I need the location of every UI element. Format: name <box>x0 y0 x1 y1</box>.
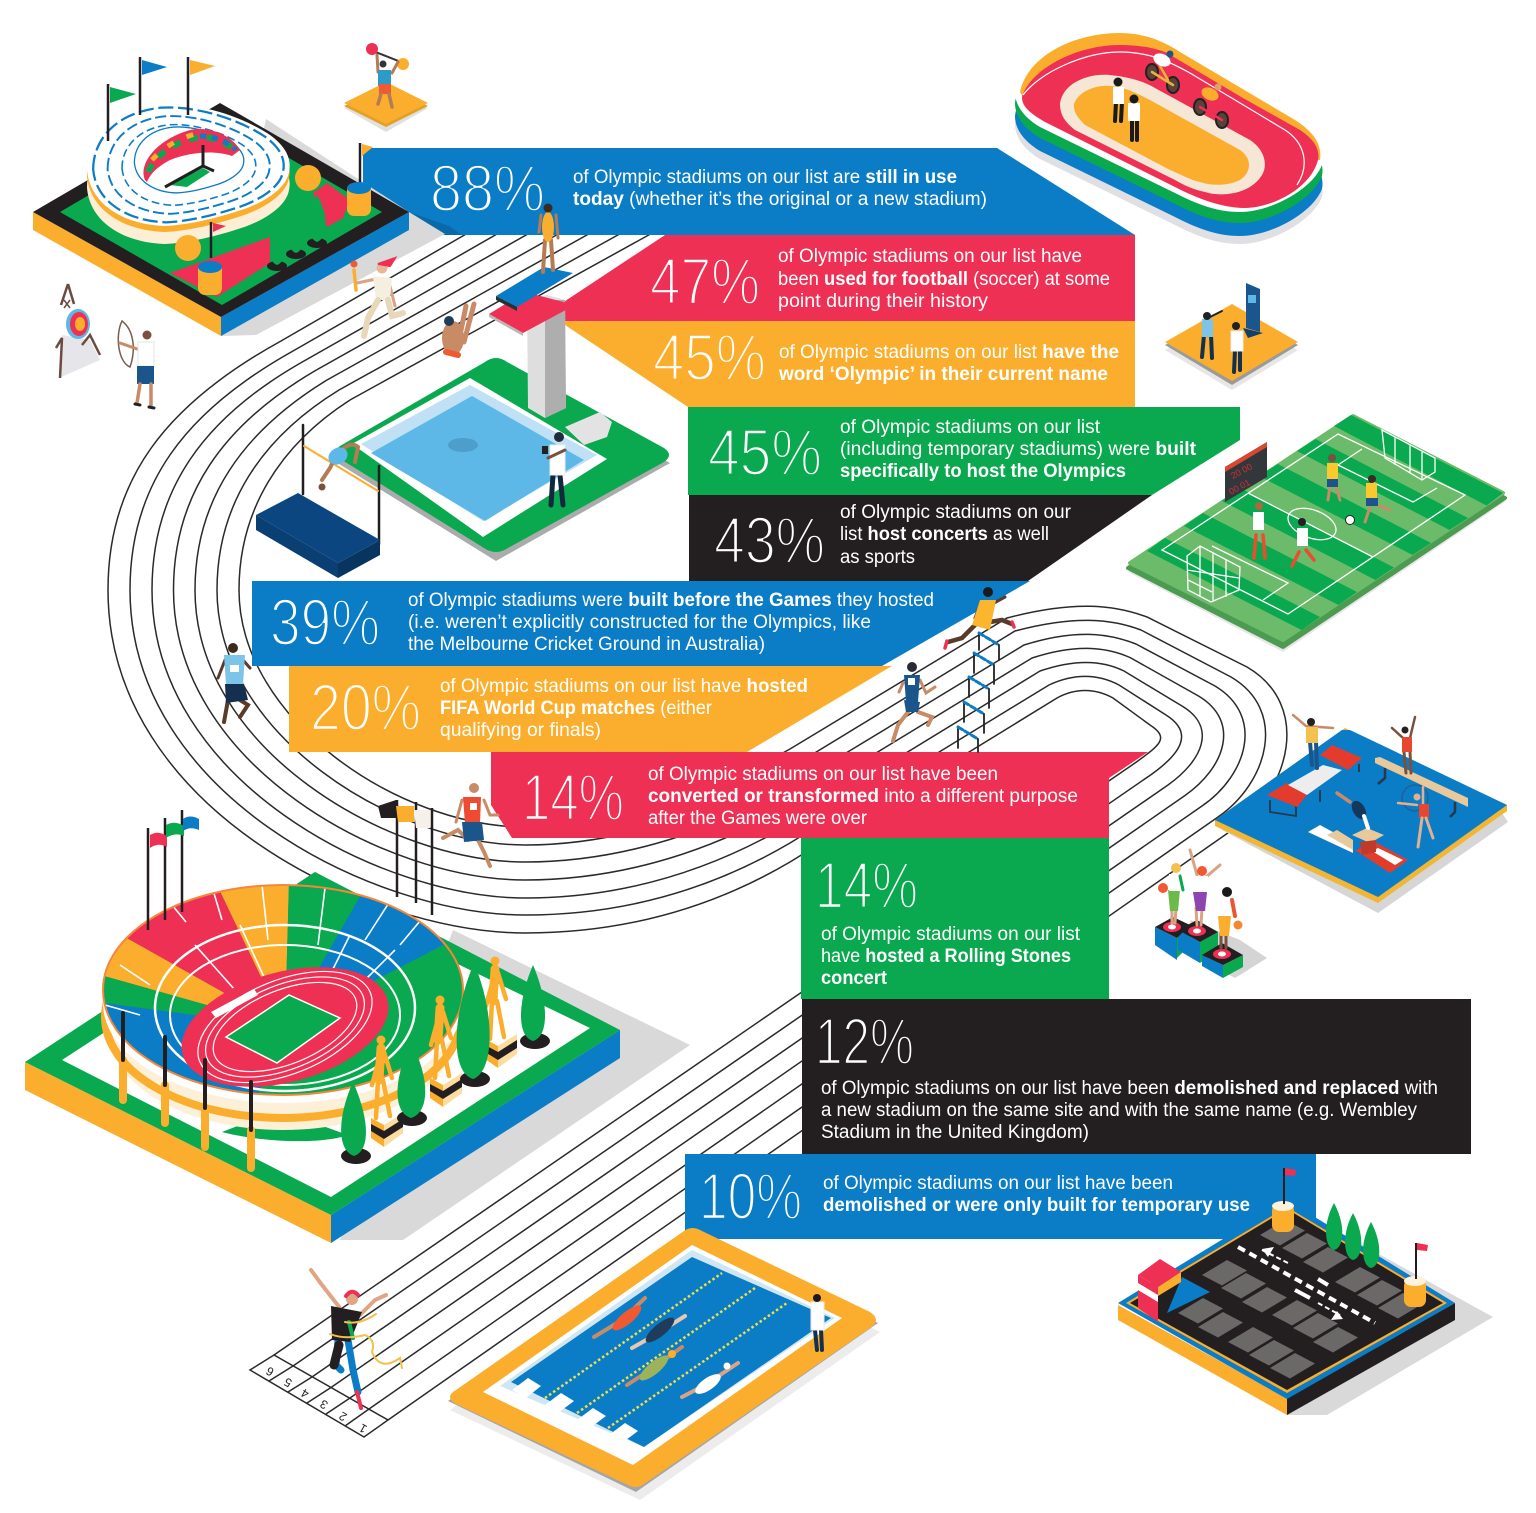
lane numbers at finish line: 6 <box>263 1364 276 1379</box>
text: 47% description: been used for football (soccer) at some <box>778 269 1110 290</box>
cylinders and flags <box>1272 1168 1428 1307</box>
figures: coaches <box>1113 78 1140 140</box>
lane numbers at finish line: 4 <box>298 1386 311 1401</box>
text: 10% description: of Olympic stadiums on our list have been <box>823 1173 1173 1194</box>
text: 14% converted description <box>648 764 1078 829</box>
stadium flags <box>148 810 199 930</box>
starting blocks <box>512 1378 638 1443</box>
stat: 88%: 88% <box>430 151 545 225</box>
stat: 10%: 10% <box>699 1159 802 1233</box>
panel: 47% football <box>535 235 1135 321</box>
text: 14% converted description: after the Games were over <box>648 808 868 829</box>
text: 43% description <box>840 502 1072 568</box>
bowl seating <box>143 129 240 187</box>
text: 14% converted description: of Olympic stadiums on our list have been <box>648 764 998 785</box>
figures: footballers <box>1253 454 1390 566</box>
text: 47% description: point during their history <box>778 291 989 312</box>
panel: 45% built for Olympics <box>688 407 1240 495</box>
text: 14% Rolling Stones description: have hosted a Rolling Stones <box>821 946 1071 967</box>
text: 14% converted description: converted or transformed into a different purpose <box>648 786 1078 807</box>
pitch markings <box>1162 434 1465 614</box>
running track <box>108 226 1287 1420</box>
panel: 12% demolished and replaced <box>802 999 1471 1154</box>
panel: 43% concerts <box>689 495 1152 581</box>
stadium flags <box>108 57 373 258</box>
text: 12% description: Stadium in the United Kingdom) <box>821 1122 1089 1143</box>
lane numbers at finish line: 2 <box>336 1409 349 1424</box>
figure: runner in red <box>443 783 498 866</box>
figure: finisher with tape <box>311 1270 402 1408</box>
illustration: medal podium <box>1155 850 1267 978</box>
illustration: diving pool and tower <box>331 267 670 561</box>
parking bays <box>1178 1220 1423 1378</box>
stat: 45%: 45% <box>708 415 822 489</box>
entrance building <box>1138 1259 1210 1322</box>
stat: 14%: 14% <box>522 760 624 834</box>
scoreboard: 00 01 <box>1227 477 1252 497</box>
balance beam <box>1375 757 1468 817</box>
figure: archer <box>118 321 154 408</box>
stat: 43%: 43% <box>714 503 825 577</box>
text: 39% description <box>408 590 934 655</box>
high jump mat <box>256 493 380 578</box>
text: 47% description <box>778 246 1110 312</box>
text: 20% description: qualifying or finals) <box>440 720 601 741</box>
text: 45% built description <box>840 417 1197 482</box>
text: 45% built description: specifically to host the Olympics <box>840 461 1126 482</box>
text: 14% Rolling Stones description: of Olympic stadiums on our list <box>821 924 1081 945</box>
figure: hurdler in navy <box>893 662 935 741</box>
text: 12% description: of Olympic stadiums on our list have been demolished and replaced with <box>821 1078 1438 1099</box>
roof and walls <box>87 104 290 244</box>
vault and runway <box>1308 825 1408 873</box>
text: 45% built description: of Olympic stadiums on our list <box>840 417 1101 438</box>
text: 45% name description: word ‘Olympic’ in their current name <box>778 364 1108 385</box>
illustration: archery target <box>56 284 100 378</box>
stadium poles <box>123 1013 251 1168</box>
coloured seating bowl <box>104 886 462 1094</box>
figure: hurdler in yellow <box>945 587 1014 648</box>
illustration: large stadium <box>25 810 690 1243</box>
panel: 45% Olympic in name <box>559 320 1135 407</box>
lane ropes <box>545 1273 787 1428</box>
lane numbers at finish line: 3 <box>317 1397 330 1412</box>
text: 20% description <box>440 676 808 741</box>
hurdles <box>958 633 999 752</box>
goals <box>1187 430 1435 602</box>
figure: runner in blue <box>218 643 250 722</box>
illustration: gymnastics mat <box>1215 715 1508 913</box>
illustration: shooting platform <box>1165 283 1298 390</box>
panel: 14% Rolling Stones <box>801 838 1109 999</box>
text: 45% name description: of Olympic stadiums on our list have the <box>779 342 1119 363</box>
figures: shooter and judge <box>1202 311 1243 372</box>
text: 12% description <box>821 1078 1438 1143</box>
figures: cyclists <box>1146 50 1228 128</box>
cypress trees <box>1326 1203 1379 1268</box>
panel: 20% FIFA <box>289 666 892 752</box>
lane numbers at finish line <box>250 1355 388 1437</box>
figure: torch runner <box>350 258 403 336</box>
figures: gymnasts <box>1293 715 1433 847</box>
text: 88% description: of Olympic stadiums on our list are still in use <box>573 167 957 188</box>
text: 20% description: of Olympic stadiums on our list have hosted <box>440 676 808 697</box>
bowl exterior bands <box>103 903 463 1130</box>
statues with pedestals <box>371 956 517 1147</box>
illustration: top-left stadium <box>33 57 445 336</box>
swimmers <box>594 1298 738 1398</box>
lane numbers at finish line: 5 <box>281 1375 294 1390</box>
text: 47% description: of Olympic stadiums on our list have <box>778 246 1082 267</box>
illustration: velodrome <box>1015 33 1323 244</box>
cylinders and trees <box>175 165 371 295</box>
figures: medallists <box>1158 850 1242 948</box>
trampoline <box>1267 745 1362 816</box>
text: 14% Rolling Stones description <box>821 924 1081 989</box>
cypress trees <box>341 963 550 1164</box>
figure: high jumper and bar <box>303 425 379 544</box>
text: 88% description <box>573 167 987 210</box>
panel: 10% temporary <box>685 1154 1316 1239</box>
track and field <box>168 946 402 1108</box>
lane numbers at finish line: 1 <box>356 1421 369 1436</box>
text: 43% description: of Olympic stadiums on our <box>840 502 1072 523</box>
text: 20% description: FIFA World Cup matches (either <box>440 698 713 719</box>
text: 45% built description: (including temporary stadiums) were built <box>840 439 1197 460</box>
figure: diver in air <box>442 304 474 355</box>
text: 10% description: demolished or were only built for temporary use <box>823 1195 1250 1216</box>
illustration: weightlifter platform <box>344 43 428 132</box>
text: 88% description: today (whether it’s the original or a new stadium) <box>573 189 987 210</box>
stat: 45%: 45% <box>653 320 766 394</box>
text: 39% description: (i.e. weren’t explicitly constructed for the Olympics, like <box>408 612 871 633</box>
text: 45% name description <box>778 342 1119 385</box>
figure: pool judge <box>542 432 565 505</box>
text: 14% Rolling Stones description: concert <box>821 968 888 989</box>
text: 39% description: the Melbourne Cricket Ground in Australia) <box>408 634 765 655</box>
illustration: banner poles over track <box>378 800 432 915</box>
panel: 39% built before Games <box>252 581 1030 666</box>
illustration: swimming pool <box>448 1228 880 1500</box>
text: 10% description <box>823 1173 1250 1216</box>
figure: pool official <box>811 1294 824 1350</box>
scoreboard: 20 00 <box>1229 461 1254 481</box>
text: 43% description: list host concerts as well <box>840 524 1049 545</box>
illustration: football pitch <box>1128 415 1505 652</box>
scoreboard <box>1225 442 1267 502</box>
text: 12% description: a new stadium on the same site and with the same name (e.g. Wembley <box>821 1100 1417 1121</box>
road markings and arrows <box>1238 1247 1375 1323</box>
pitch stripes <box>1147 415 1503 630</box>
text: 39% description: of Olympic stadiums were built before the Games they hosted <box>408 590 934 611</box>
stat: 12%: 12% <box>815 1004 914 1078</box>
stat: 39%: 39% <box>270 585 380 659</box>
illustration: parking lot <box>1118 1168 1493 1415</box>
text: 43% description: as sports <box>840 547 915 568</box>
panel: 14% converted <box>491 752 1148 838</box>
stat: 20%: 20% <box>310 670 421 744</box>
figure: diver standing <box>539 204 558 272</box>
stat: 47%: 47% <box>650 244 760 318</box>
stat: 14%: 14% <box>815 848 918 922</box>
panel: 88% still in use <box>363 148 1135 235</box>
